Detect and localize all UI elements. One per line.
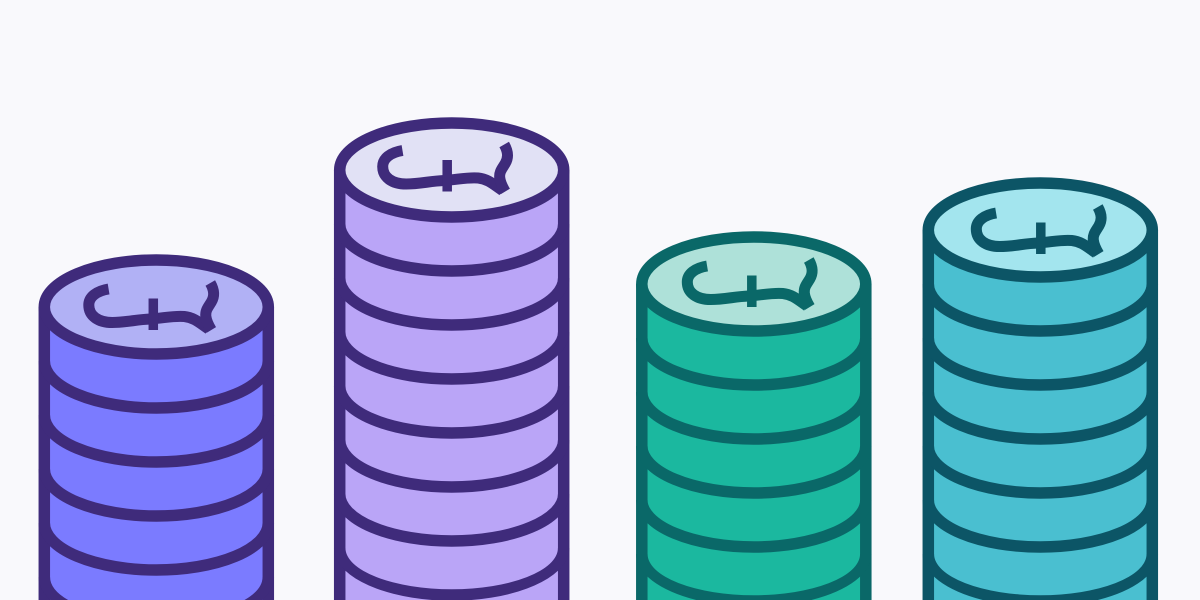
stack 3: green coins [636,237,872,600]
icon: pound sign [89,283,214,330]
icon: pound sign [383,144,508,192]
stack 4: teal coins [923,183,1158,600]
icon: pound sign [687,260,812,307]
stack 2: violet coins [334,123,569,600]
stack 1: blue coins [39,260,274,600]
icon: pound sign [976,207,1101,254]
